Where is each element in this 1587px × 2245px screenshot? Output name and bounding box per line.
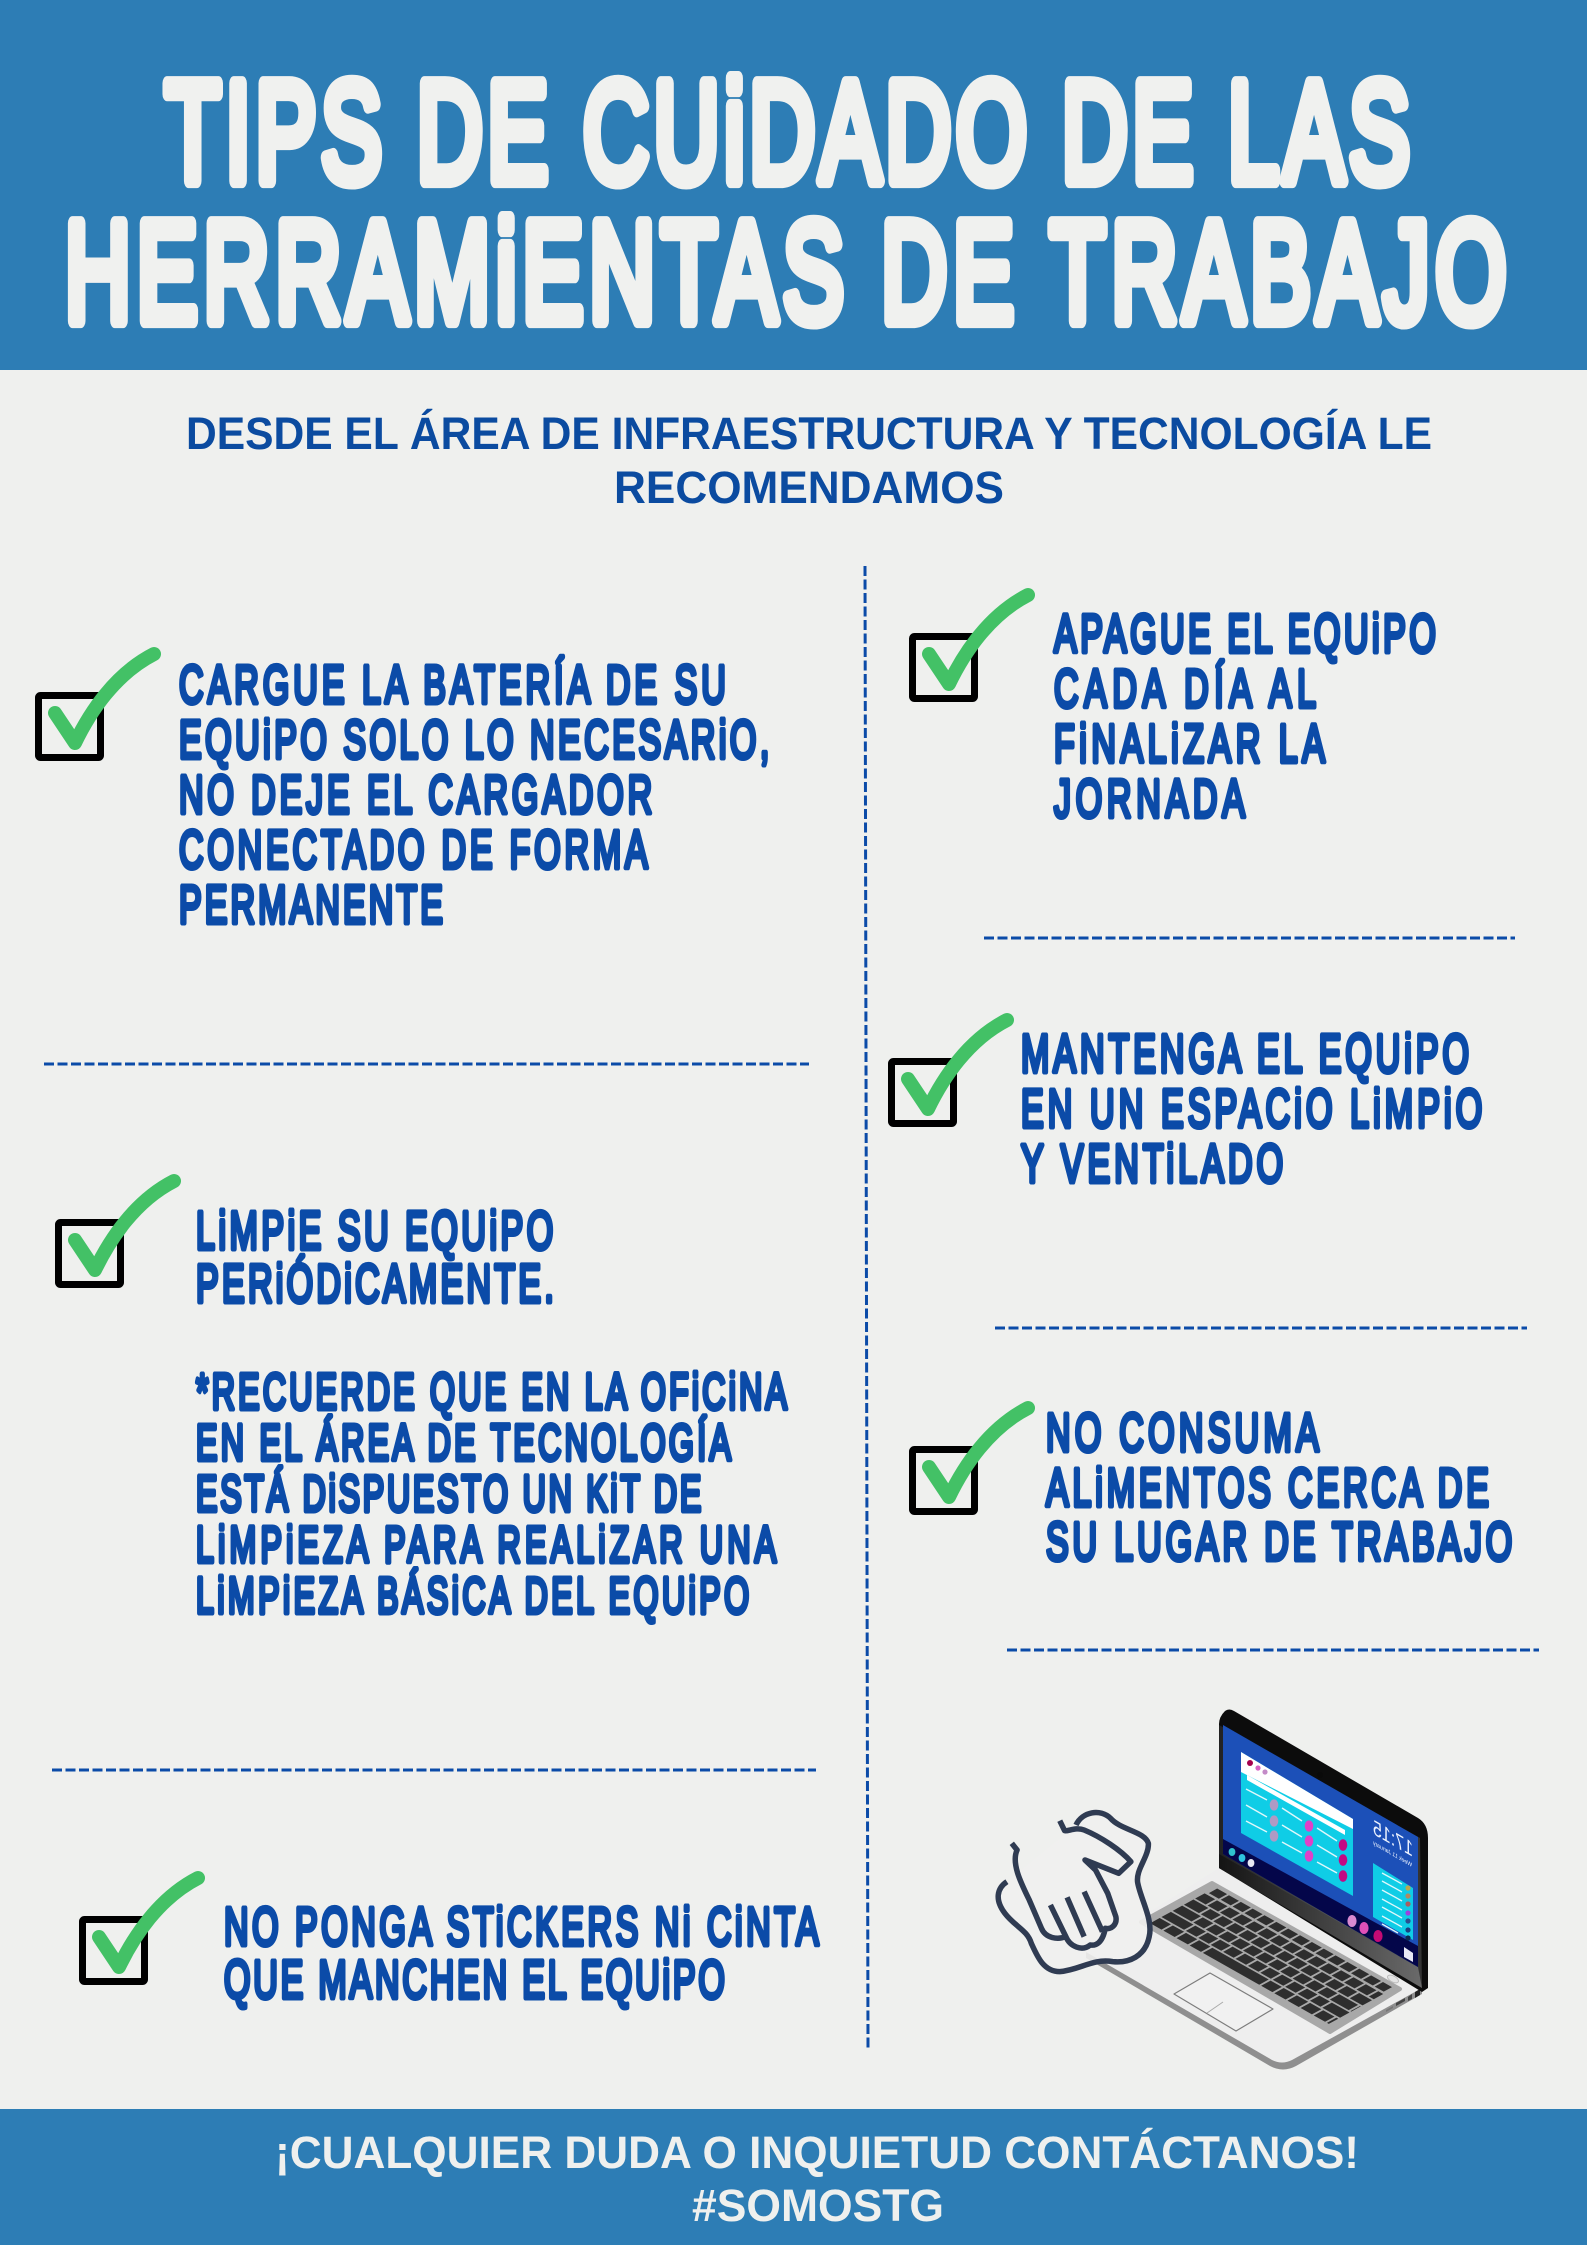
subtitle — [186, 408, 1432, 513]
laptop lid — [1219, 1710, 1428, 1992]
header band with title: TIPS DE CUiDADO DE LAS — [165, 54, 1410, 212]
tip 2 text: LiMPiEZA BÁSiCA DEL EQUiPO — [196, 1568, 749, 1625]
icon: checkbox 5 — [892, 1020, 1007, 1124]
trackpad — [1174, 1973, 1273, 2031]
footer band with contact message: ¡CUALQUIER DUDA O INQUIETUD CONTÁCTANOS! — [275, 2127, 1359, 2178]
tip 6 text: NO CONSUMA — [1046, 1402, 1319, 1463]
icon: checkbox 3 — [82, 1878, 198, 1982]
tip 1 text: CONECTADO DE FORMA — [179, 819, 648, 880]
tip 5 text — [1021, 1023, 1482, 1194]
tip 2 text: ESTÁ DiSPUESTO UN KiT DE — [196, 1466, 701, 1523]
tip 2 text: PERiÓDiCAMENTE. — [196, 1253, 554, 1314]
footer band with contact message — [0, 2109, 1587, 2245]
tip 5 text: MANTENGA EL EQUiPO — [1021, 1023, 1469, 1084]
tip 2: cleaning — [58, 1181, 787, 1625]
tip 3 text: QUE MANCHEN EL EQUiPO — [224, 1949, 725, 2010]
tip 1 text: NO DEJE EL CARGADOR — [179, 764, 652, 825]
tip 4 text: APAGUE EL EQUiPO — [1054, 603, 1436, 664]
mirrored clock — [1372, 1814, 1413, 1869]
tip 4 text: CADA DÍA AL — [1054, 658, 1316, 719]
footer band with contact message: #SOMOSTG — [692, 2180, 944, 2231]
tip 3 text — [224, 1896, 819, 2010]
tip 2 text — [196, 1200, 787, 1625]
tip 4 text: FiNALiZAR LA — [1054, 713, 1325, 774]
tip 3 text: NO PONGA STiCKERS Ni CiNTA — [224, 1896, 819, 1957]
tip 5: clean space — [892, 1020, 1482, 1194]
tip 5 text: EN UN ESPACiO LiMPiO — [1021, 1078, 1482, 1139]
tip 6 text: SU LUGAR DE TRABAJO — [1046, 1511, 1512, 1572]
tip 1: battery — [38, 654, 769, 935]
tip 4: shut down — [912, 595, 1436, 829]
icon: hand with cloth — [998, 1813, 1150, 1972]
tip 6 text: ALiMENTOS CERCA DE — [1046, 1457, 1489, 1518]
subtitle: DESDE EL ÁREA DE INFRAESTRUCTURA Y TECNOLOGÍA LE — [186, 408, 1432, 459]
tip 4 text: JORNADA — [1054, 768, 1245, 829]
tip 2 text: *RECUERDE QUE EN LA OFiCiNA — [196, 1364, 787, 1421]
tip 2 text: EN EL ÁREA DE TECNOLOGÍA — [196, 1415, 731, 1472]
subtitle: RECOMENDAMOS — [614, 462, 1004, 513]
power button and side ports — [1386, 1974, 1420, 2012]
tip 2 text: LiMPiEZA PARA REALiZAR UNA — [196, 1517, 777, 1574]
tip 1 text: PERMANENTE — [179, 874, 443, 935]
illustration: laptop being wiped by a hand with a cloth — [998, 1710, 1428, 2070]
tip 1 text — [179, 654, 769, 935]
tip 4 text — [1054, 603, 1436, 829]
laptop base — [1086, 1868, 1422, 2070]
icon: checkbox 1 — [38, 654, 154, 758]
tip 1 text: EQUiPO SOLO LO NECESARiO, — [179, 709, 769, 770]
tip 3: stickers — [82, 1878, 819, 2010]
tip 6 text — [1046, 1402, 1512, 1572]
icon: checkbox 2 — [58, 1181, 174, 1284]
header band with title — [0, 0, 1587, 370]
icon: checkbox 4 — [912, 595, 1028, 698]
mirrored clock: 17:15 — [1373, 1814, 1413, 1862]
tip 5 text: Y VENTiLADO — [1021, 1133, 1283, 1194]
dock icons — [1229, 1848, 1413, 1962]
side panel on screen — [1373, 1863, 1413, 1941]
mirrored clock: Week 11 January — [1372, 1839, 1412, 1869]
keyboard — [1155, 1890, 1390, 2021]
tip 2 text: LiMPiE SU EQUiPO — [196, 1200, 553, 1261]
tip 1 text: CARGUE LA BATERÍA DE SU — [179, 654, 726, 715]
vertical dashed divider — [865, 566, 868, 2048]
icon: checkbox 6 — [912, 1408, 1028, 1512]
header band with title: HERRAMiENTAS DE TRABAJO — [65, 194, 1506, 352]
tip 6: food — [912, 1402, 1512, 1572]
screen window — [1241, 1752, 1353, 1896]
